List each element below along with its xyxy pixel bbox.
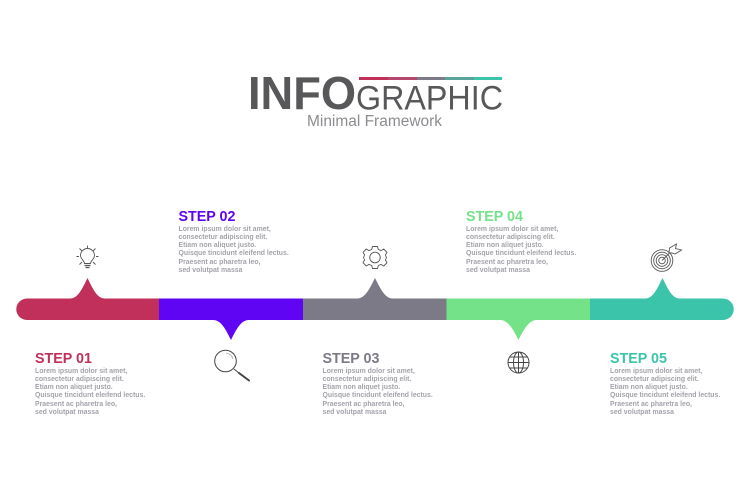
step 02 text: consectetur adipiscing elit.	[178, 234, 267, 241]
step 02 text: STEP 02	[178, 209, 235, 225]
step 01 text: Etiam non aliquet justo.	[35, 384, 113, 391]
step 04 text: Praesent ac pharetra leo,	[466, 259, 548, 266]
segment 3	[303, 278, 446, 320]
step 02 text: Etiam non aliquet justo.	[178, 242, 256, 249]
step 04 text: consectetur adipiscing elit.	[466, 234, 555, 241]
step 05 text	[610, 351, 720, 416]
step 05 text: Lorem ipsum dolor sit amet,	[610, 368, 702, 375]
step 05 text: STEP 05	[610, 351, 667, 367]
step 04 text: Quisque tincidunt eleifend lectus.	[466, 250, 576, 257]
step 02 text: Lorem ipsum dolor sit amet,	[178, 226, 271, 233]
step 01 text: sed volutpat massa	[35, 409, 99, 416]
step 05 text: consectetur adipiscing elit.	[610, 376, 699, 383]
segment 5	[590, 278, 734, 320]
segment 1	[16, 278, 159, 320]
step 02 text: Praesent ac pharetra leo,	[178, 259, 260, 266]
step 03 text: Etiam non aliquet justo.	[322, 384, 400, 391]
step 03 text: Lorem ipsum dolor sit amet,	[322, 368, 415, 375]
step 03 text: Praesent ac pharetra leo,	[322, 401, 404, 408]
step 02 text: Quisque tincidunt eleifend lectus.	[178, 250, 289, 257]
step 03 text: consectetur adipiscing elit.	[322, 376, 411, 383]
step 01 text: consectetur adipiscing elit.	[35, 376, 124, 383]
step 03 text: sed volutpat massa	[322, 409, 386, 416]
step 05 text: sed volutpat massa	[610, 409, 674, 416]
step 04 text: STEP 04	[466, 209, 523, 225]
step 01 text: Quisque tincidunt eleifend lectus.	[35, 392, 145, 399]
title: GRAPHIC	[356, 80, 503, 118]
step 03 text	[322, 351, 433, 416]
step 04 text	[466, 209, 576, 274]
step 02 text	[178, 209, 289, 274]
step 03 text: STEP 03	[322, 351, 379, 367]
segment 2	[159, 298, 303, 340]
step 01 text: Praesent ac pharetra leo,	[35, 401, 117, 408]
step 04 text: sed volutpat massa	[466, 267, 530, 274]
step 05 text: Praesent ac pharetra leo,	[610, 401, 692, 408]
step 04 text: Etiam non aliquet justo.	[466, 242, 544, 249]
step 01 text: STEP 01	[35, 351, 92, 367]
step 01 text	[35, 351, 145, 416]
step 05 text: Etiam non aliquet justo.	[610, 384, 688, 391]
step 01 text: Lorem ipsum dolor sit amet,	[35, 368, 127, 375]
segment 4	[446, 298, 590, 340]
step 02 text: sed volutpat massa	[178, 267, 242, 274]
step 04 text: Lorem ipsum dolor sit amet,	[466, 226, 558, 233]
step 03 text: Quisque tincidunt eleifend lectus.	[322, 392, 433, 399]
step 05 text: Quisque tincidunt eleifend lectus.	[610, 392, 720, 399]
title: INFO	[248, 67, 356, 119]
title: Minimal Framework	[307, 113, 442, 130]
